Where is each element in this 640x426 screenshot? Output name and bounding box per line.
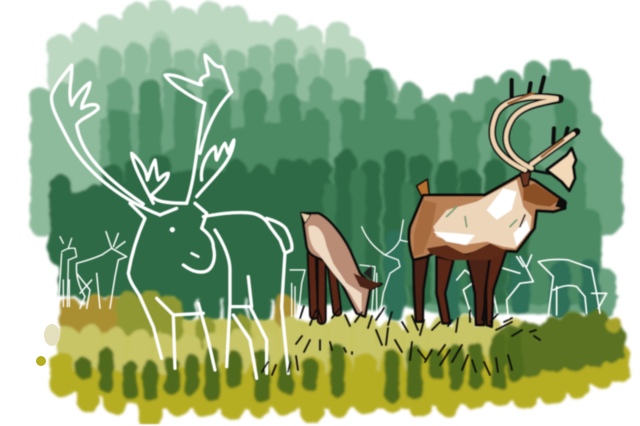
rump shade [413, 200, 437, 257]
caribou bull [409, 77, 577, 327]
panel: painted meadow [62, 296, 625, 418]
dark belly [427, 243, 507, 260]
grass blades [262, 306, 540, 375]
brown and olive upper grass [62, 296, 285, 338]
head and neck [128, 203, 214, 358]
green paint flecks [447, 207, 517, 227]
shovel antler [547, 148, 576, 191]
nose [555, 197, 567, 209]
icon: small olive paint dot [36, 356, 46, 366]
panel: painted forest background [36, 12, 622, 318]
dark head shade [523, 183, 560, 207]
far legs [437, 250, 507, 327]
white highlights [433, 188, 530, 247]
dark olive lower strokes [84, 335, 515, 396]
cream flank and chest [433, 180, 532, 248]
grazing doe [301, 213, 382, 320]
doe tail [301, 213, 311, 223]
dark olive right grass mass [510, 318, 625, 370]
doe pale underside [308, 226, 362, 313]
doe body [302, 213, 382, 317]
eye [170, 227, 175, 232]
chest mark [520, 215, 525, 227]
yellow spot [606, 317, 622, 333]
small white deer herd, left [58, 232, 127, 308]
icon: pale paint blob [44, 324, 60, 346]
darkest green tree strokes [58, 160, 518, 318]
mid green tree strokes [100, 70, 622, 314]
pale ground base [62, 318, 540, 385]
antler tines [512, 77, 568, 143]
back and hind leg [203, 212, 292, 373]
large white outline deer [51, 55, 292, 378]
tail [417, 179, 429, 198]
pale tree strokes [36, 50, 430, 235]
brow tines [132, 153, 187, 203]
left antler [51, 65, 160, 215]
ear [520, 172, 531, 187]
nose [192, 253, 198, 257]
doe ear [363, 265, 372, 280]
near legs [413, 257, 490, 325]
doe legs [312, 253, 337, 320]
body [409, 175, 565, 260]
right antler [165, 55, 232, 203]
small white deer herd, right [290, 220, 607, 318]
palest tree strokes [60, 12, 360, 130]
antler connector [530, 170, 557, 175]
antler brown accents [508, 93, 563, 157]
rear antler outline [492, 97, 577, 170]
pale yellow-green grass [68, 325, 535, 380]
antler fill [492, 97, 573, 170]
chest and front legs [215, 230, 267, 378]
saturated olive lower grass [62, 355, 625, 418]
foreground animals and grass [51, 55, 607, 378]
doe head [353, 273, 382, 290]
teal strokes behind the meadow line [395, 240, 590, 315]
darker green tree strokes [120, 80, 590, 305]
